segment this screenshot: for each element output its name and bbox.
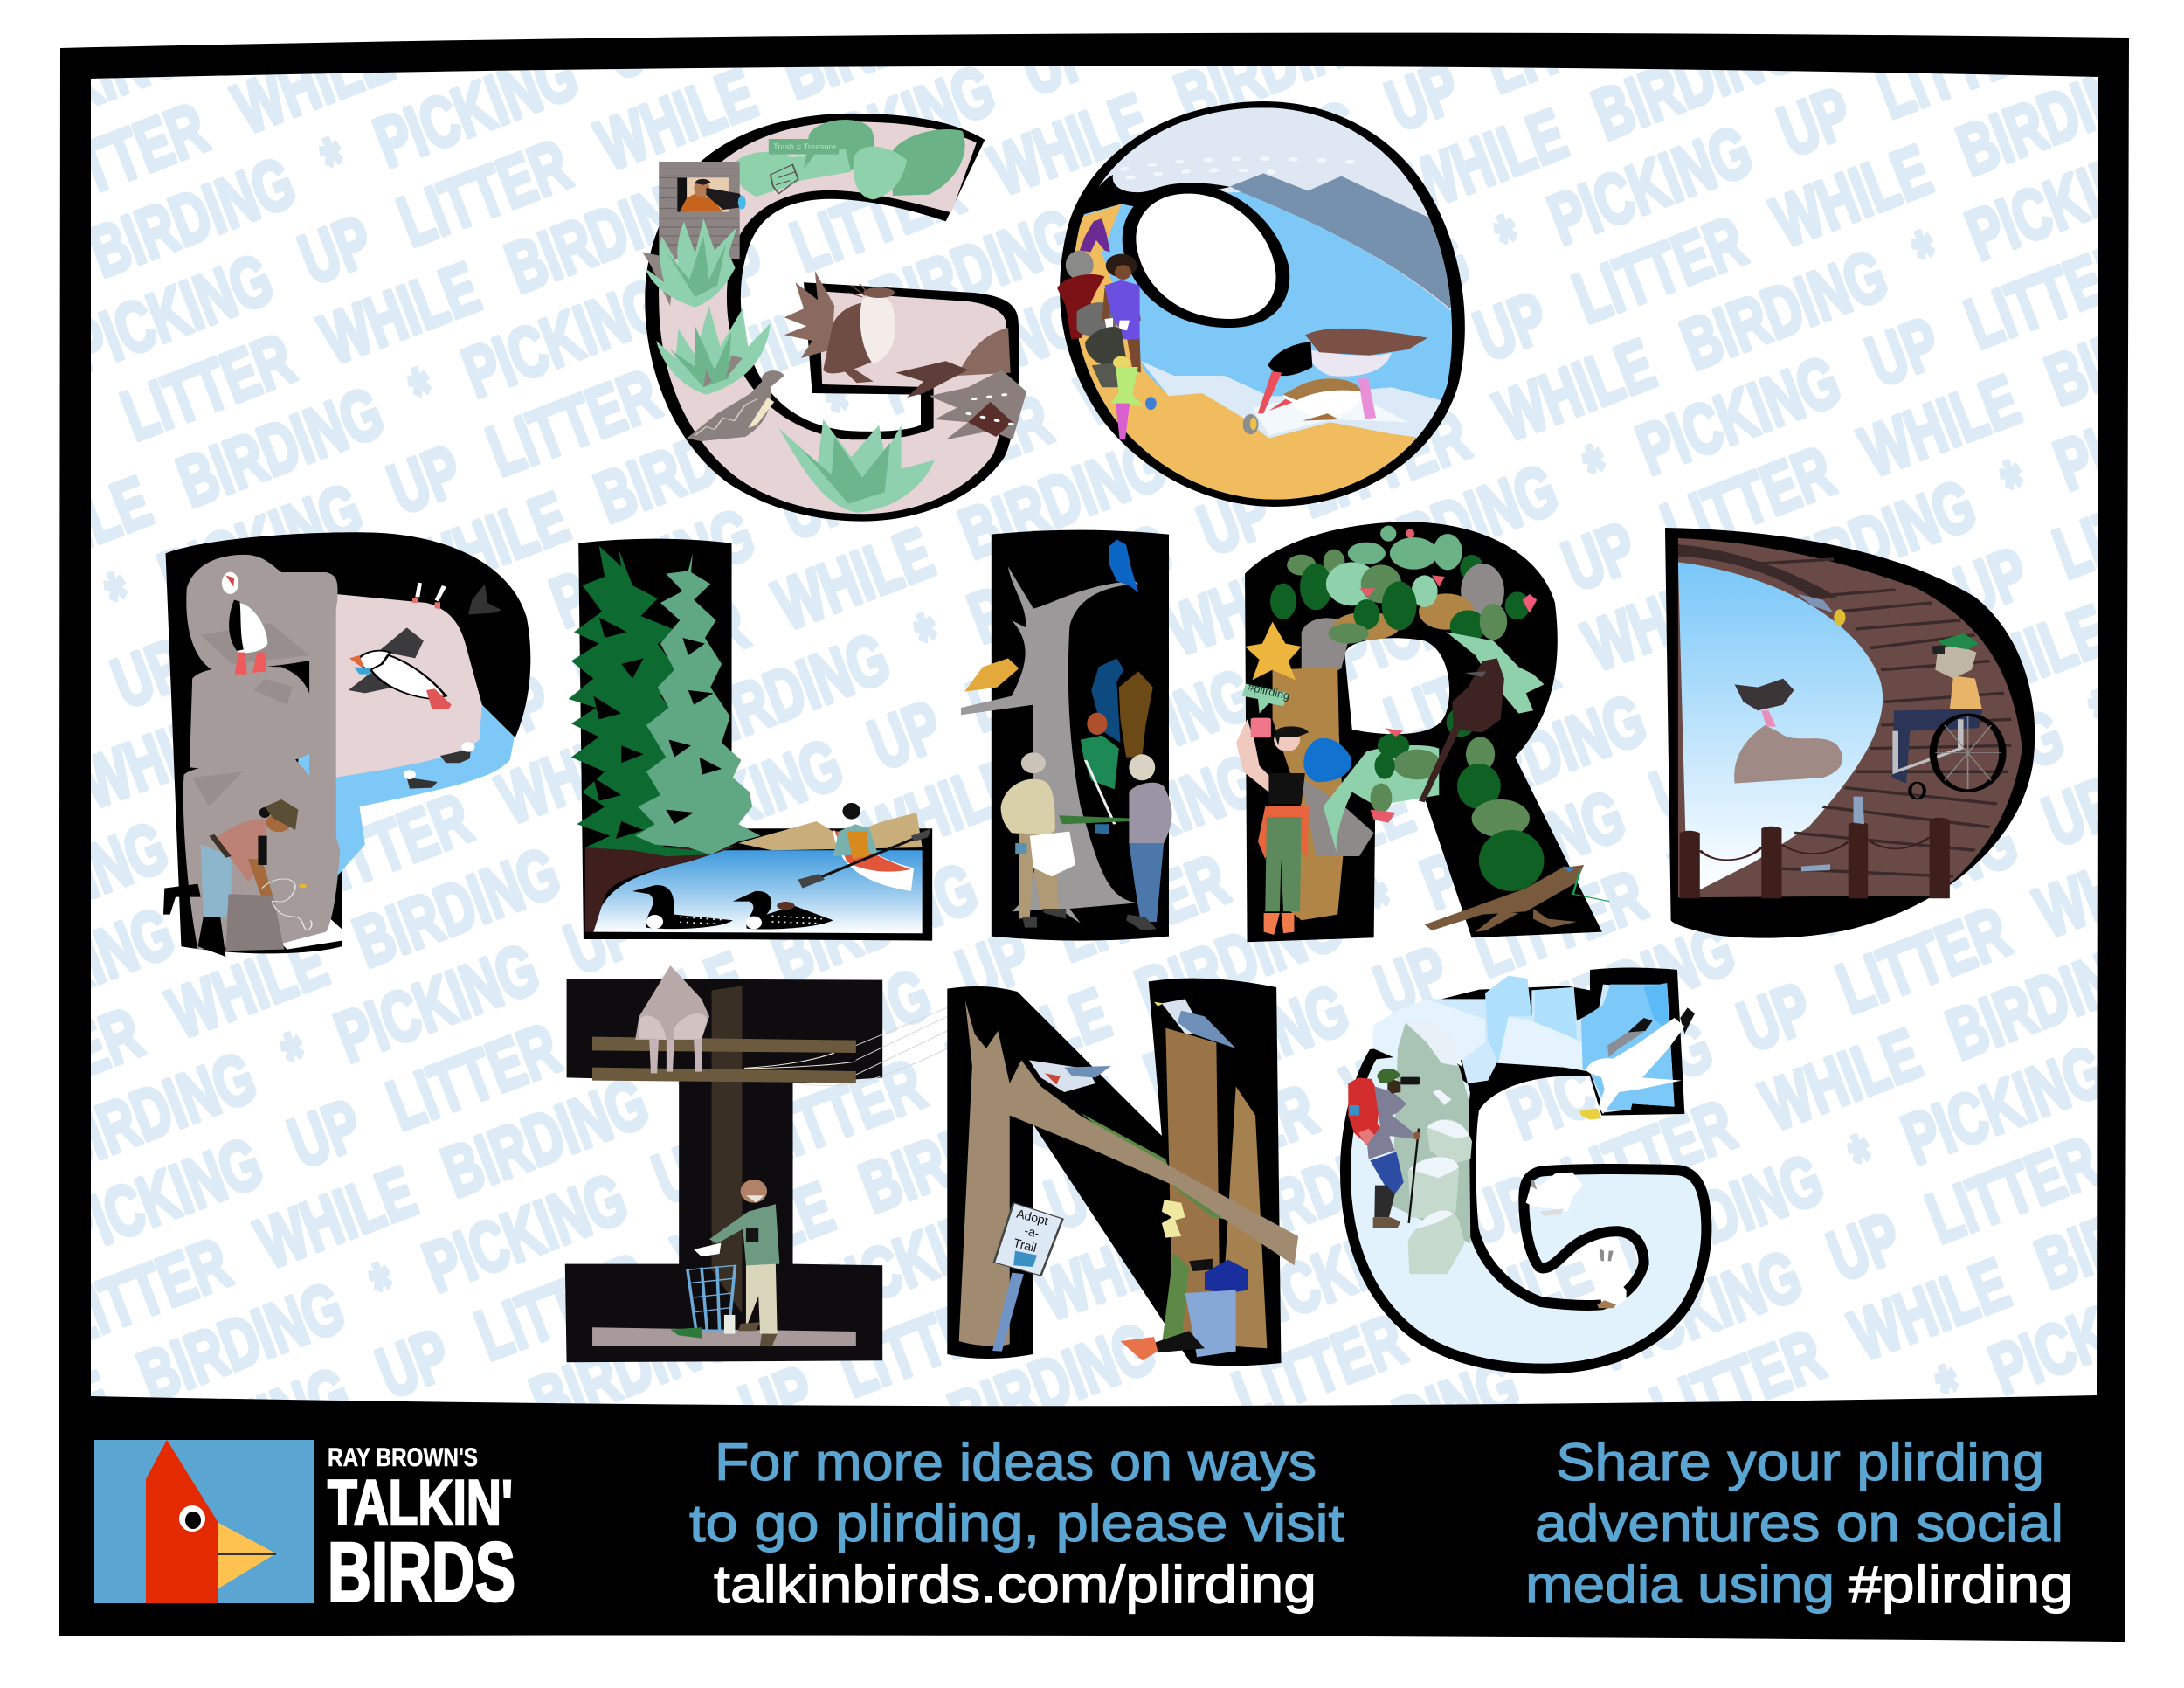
letter P: puffin cliff scene bbox=[163, 532, 530, 957]
lake water bbox=[593, 850, 923, 933]
loons bbox=[632, 885, 833, 930]
letter G: sagebrush scene bbox=[642, 114, 1026, 522]
rock and tan soil behind woman bbox=[1273, 618, 1374, 920]
background watermark: BIRDING * PICKING UP LITTER WHILE: BIRDING * PICKING UP LITTER WHILE BIRDING * PICKING UP LI bbox=[521, 733, 2184, 1442]
G body bbox=[1345, 1048, 1706, 1369]
gray-blue bird with chicks bbox=[1798, 594, 1845, 626]
letter N: fallen tree scene bbox=[947, 979, 1298, 1366]
black ring and white counter of O bbox=[1080, 175, 1289, 328]
boardwalk deck bbox=[1678, 538, 2022, 897]
hashtag sign: #plirding bbox=[1242, 680, 1291, 714]
footer logo: Talkin' Birds bbox=[94, 1440, 515, 1619]
speech bubble: Trash = Treasure bbox=[769, 139, 839, 169]
bird blind with woman and spotting scope bbox=[659, 162, 746, 259]
female sage grouse bbox=[687, 370, 784, 441]
owl trio on crossbar bbox=[635, 965, 709, 1073]
lower roadrunner with litter bbox=[1425, 865, 1609, 932]
light green spruce bbox=[635, 553, 761, 854]
black and gold bird bbox=[964, 658, 1019, 692]
background watermark: BIRDING * PICKING UP LITTER WHILE: PICKING UP LITTER WHILE BIRDING * PICKING UP LITTER WHILE BIRDING * bbox=[137, 674, 2127, 1502]
blue bird on branch bbox=[1109, 539, 1138, 592]
prickly pear pads top bbox=[1270, 526, 1537, 644]
child in green dress bbox=[1110, 356, 1157, 439]
background watermark: BIRDING * PICKING UP LITTER WHILE: BIRDING * PICKING UP LITTER WHILE BIRDING bbox=[939, 924, 2163, 1457]
D letterform bbox=[1665, 528, 2035, 938]
background watermark: BIRDING * PICKING UP LITTER WHILE: LITTER WHILE BIRDING * PICKING UP LITTER WHILE BIRDING * PICKING UP LITTER bbox=[48, 456, 2184, 1359]
P letterform with water bbox=[166, 532, 530, 953]
litter on the boardwalk bbox=[1801, 797, 1864, 871]
blue pitcher / globe bbox=[1303, 738, 1351, 782]
logo wordmark: BIRDS bbox=[328, 1525, 515, 1619]
oystercatcher adult bbox=[1258, 329, 1427, 419]
background watermark: BIRDING * PICKING UP LITTER WHILE: PICKING UP LITTER WHILE BIRDING * PICKING UP LITTER WHILE BIRDING * PICKING bbox=[0, 126, 2180, 1041]
woman in purple shirt with trash bag bbox=[1085, 254, 1141, 387]
gyrfalcon bbox=[1579, 1007, 1695, 1120]
ice wall bbox=[1373, 976, 1675, 1112]
crumpled litter bbox=[771, 164, 798, 194]
logo wordmark: TALKIN' bbox=[328, 1468, 513, 1539]
background watermark: BIRDING * PICKING UP LITTER WHILE: BIRDING * PICKING UP LITTER W bbox=[1303, 1090, 2184, 1494]
background watermark: BIRDING * PICKING UP LITTER WHILE bbox=[91, 66, 2098, 1407]
swimming puffins bbox=[404, 742, 475, 789]
footer text: more ideas: to go plirding, please visit bbox=[689, 1494, 1344, 1553]
I letterform bbox=[565, 979, 882, 1362]
tall letter I: picking up litter in the woods bbox=[961, 530, 1172, 941]
birder picking up fishing line bbox=[163, 799, 312, 957]
background watermark: BIRDING * PICKING UP LITTER WHILE: BIRDING * PICKING UP LITTER WHILE BIRDING * PICKING UP LITTER WHILE BIRDING bbox=[0, 40, 2174, 957]
fallen limb and left trunk bbox=[959, 1000, 1298, 1346]
footer text: share on social: media using bbox=[1525, 1555, 1835, 1614]
letter D: boardwalk scene bbox=[1665, 528, 2035, 938]
dark gaps in spruce bbox=[593, 618, 644, 839]
logo wordmark bbox=[328, 1443, 515, 1619]
oystercatcher chick and clam bbox=[1243, 378, 1361, 434]
footer text: share on social: adventures on social bbox=[1535, 1494, 2063, 1553]
footer text: more ideas: talkinbirds.com/plirding bbox=[714, 1555, 1317, 1614]
standing puffin bbox=[222, 572, 267, 675]
male sage grouse bbox=[784, 271, 895, 383]
man with litter and basket bbox=[670, 1180, 779, 1347]
small flying puffin bbox=[468, 584, 501, 614]
yellow shelf fungus bbox=[1162, 1200, 1185, 1238]
crossbars bbox=[592, 1037, 856, 1083]
Adopt-a-Trail sign: Adopt bbox=[1015, 1207, 1050, 1228]
N letterform bbox=[947, 979, 1281, 1366]
sagebrush clump upper bbox=[642, 218, 737, 308]
silhouettes of two birders bbox=[1091, 658, 1153, 758]
logo wordmark: RAY BROWN'S bbox=[328, 1443, 478, 1472]
footer text: share on social bbox=[1525, 1433, 2073, 1614]
black top arm bbox=[1441, 967, 1684, 1116]
L letterform bbox=[578, 539, 932, 941]
hiker with red backpack and binoculars bbox=[1348, 1069, 1420, 1228]
letter G: arctic scene bbox=[1345, 967, 1706, 1369]
footer text: share on social: Share your plirding bbox=[1556, 1433, 2044, 1491]
distant purple silhouette figure bbox=[1080, 218, 1110, 252]
background watermark: BIRDING * PICKING UP LITTER WHILE: UP LITTER WHILE BIRDING * PICKING UP LITTER WHILE bbox=[730, 820, 2184, 1449]
dark green spruce bbox=[569, 546, 710, 856]
older man with white bag bbox=[1001, 752, 1131, 928]
utility pole bbox=[712, 986, 742, 1313]
kayak with paddler bbox=[798, 803, 931, 891]
prickly pear pads lower bbox=[1370, 728, 1545, 891]
white cable bbox=[744, 1053, 856, 1069]
speech bubble: Trash = Treasure: Trash = Treasure bbox=[773, 142, 836, 152]
sidewalk bbox=[592, 1327, 856, 1346]
sky counter bbox=[1678, 562, 1883, 889]
large flying puffin bbox=[349, 627, 452, 709]
bare gray tree bbox=[961, 566, 1138, 924]
beach background bbox=[1075, 107, 1452, 500]
Adopt-a-Trail sign bbox=[992, 1203, 1062, 1352]
logo square with cardinal bbox=[94, 1440, 314, 1603]
dark planks on deck bbox=[1758, 559, 2011, 876]
serif letter I: utility pole scene bbox=[565, 965, 947, 1362]
center brown trunk bbox=[1165, 1028, 1220, 1346]
woman in gray hoodie bbox=[1126, 754, 1172, 930]
black bird on mound bbox=[1734, 679, 1842, 784]
Adopt-a-Trail sign: Trail bbox=[1013, 1235, 1038, 1255]
maroon volunteer and gray bags bbox=[1057, 251, 1116, 339]
vine of light pads around counter bbox=[1324, 632, 1545, 856]
birder in wheelchair bbox=[1892, 633, 2002, 799]
dock posts and ropes bbox=[1680, 818, 1950, 898]
background watermark: BIRDING * PICKING UP LITTER WHILE: LITTER WHILE BIRD bbox=[1641, 1186, 2168, 1452]
cliff rocks bbox=[183, 555, 340, 950]
footer text: more ideas: For more ideas on ways bbox=[715, 1433, 1317, 1491]
gaps in light spruce bbox=[666, 638, 722, 824]
background watermark: BIRDING * PICKING UP LITTER WHILE: LITTER WHILE BIRDING * PICKING bbox=[1223, 1030, 2116, 1436]
seated birder with binoculars bbox=[1121, 1259, 1248, 1360]
earth bank bbox=[585, 846, 738, 932]
right strip trunk bbox=[1220, 1086, 1267, 1348]
nuthatch on limb bbox=[1029, 1060, 1111, 1092]
woman taking selfie bbox=[1236, 718, 1309, 935]
letter L: lake and spruce scene bbox=[569, 539, 932, 941]
dark band of boardwalk rail top bbox=[1678, 544, 1837, 600]
second displaying grouse bbox=[895, 328, 1026, 439]
beige hills bbox=[738, 813, 923, 850]
wires bbox=[799, 1007, 947, 1086]
nuthatch on trunk top bbox=[1154, 999, 1236, 1048]
snow-capped rock column bbox=[1392, 1020, 1472, 1274]
background watermark: BIRDING * PICKING UP LITTER WHILE: * PICKI bbox=[1926, 1287, 2133, 1430]
upper roadrunner bbox=[1419, 658, 1504, 802]
green bushes bbox=[734, 120, 965, 199]
footer text: share on social: #plirding bbox=[1849, 1555, 2073, 1614]
R letterform bbox=[1245, 522, 1602, 942]
I letterform bbox=[992, 530, 1169, 941]
footer text: more ideas bbox=[689, 1433, 1344, 1614]
sagebrush clump lower bbox=[778, 419, 935, 513]
sagebrush clump middle bbox=[656, 306, 771, 395]
letter O: beach scene bbox=[1057, 101, 1469, 509]
woman in green with litter grabber bbox=[1081, 713, 1119, 834]
snowshoe hare lower bbox=[1594, 1249, 1627, 1308]
G letterform bbox=[645, 114, 1019, 522]
arctic hare upper bbox=[1526, 1173, 1583, 1216]
Adopt-a-Trail sign: -a- bbox=[1023, 1223, 1041, 1241]
pair of small puffins on cliff top bbox=[409, 575, 446, 609]
hashtag sign: #plirding: #plirding bbox=[1247, 680, 1291, 702]
O letterform bbox=[1060, 101, 1465, 507]
moss bbox=[1080, 1112, 1232, 1346]
gold star balloon bbox=[1245, 622, 1302, 680]
letter R: cactus scene bbox=[1236, 522, 1609, 942]
